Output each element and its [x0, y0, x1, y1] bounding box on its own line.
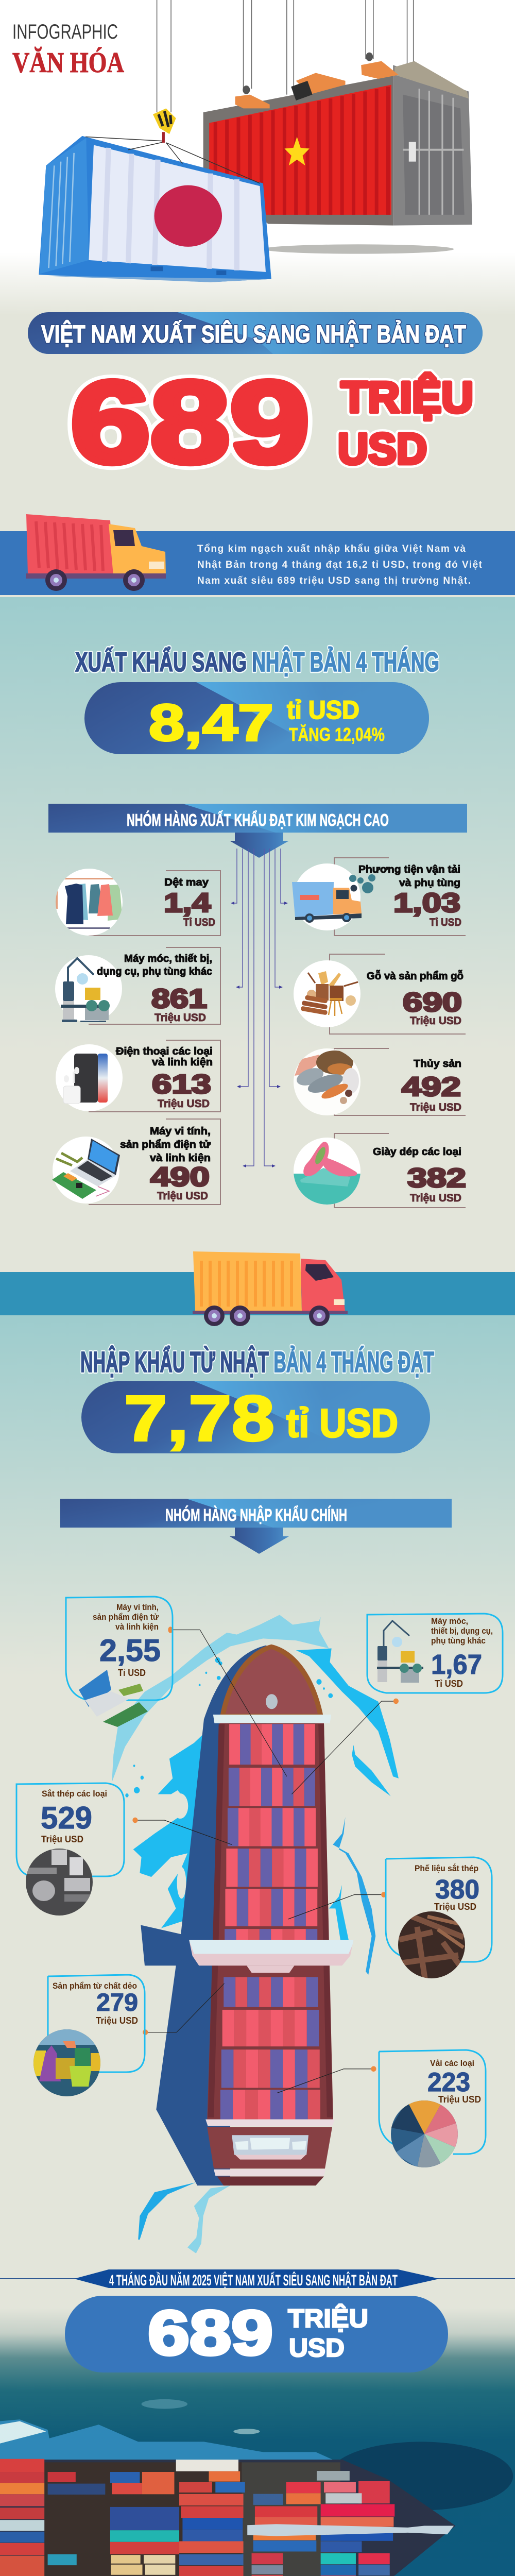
card: Máy vi tính: và linh kiện [150, 1153, 211, 1164]
photo: steel bars [26, 1849, 95, 1916]
card: Máy móc, thiết bị: Triệu USD [154, 1012, 206, 1024]
card: Điện thoại: 613 [152, 1070, 211, 1099]
container ship illustration [112, 1615, 399, 2253]
callout: Máy móc: phụ tùng khác [431, 1636, 486, 1646]
callout: Máy móc: thiết bị, dụng cụ, [431, 1626, 493, 1636]
callout: Sản phẩm từ chất dẻo [33, 1975, 145, 2096]
summary band [0, 531, 515, 595]
icon: wood logs [294, 960, 360, 1027]
callout: Phế liệu sắt thép: Phế liệu sắt thép [415, 1863, 478, 1873]
headline number: 689 triệu USD: TRIỆU [341, 373, 473, 421]
stat pill: 7,78 tỉ USD: 7,78 [124, 1383, 274, 1454]
card: Máy vi tính: sản phẩm điện tử [120, 1139, 211, 1150]
card: Máy móc, thiết bị [55, 947, 220, 1024]
icon: laptop [79, 1670, 148, 1727]
stat pill: 7,78 tỉ USD [81, 1381, 430, 1454]
card: Máy vi tính: Triệu USD [157, 1190, 208, 1202]
headline number: 689 triệu USD: TRIỆU [341, 373, 473, 421]
callout: Máy vi tính [66, 1597, 173, 1727]
summary text [197, 544, 483, 586]
logo: Infographic Văn Hóa: VĂN HÓA [12, 46, 124, 79]
icon: machine [377, 1621, 423, 1683]
stat pill: 8,47 tỉ USD [84, 682, 429, 754]
card: Máy vi tính [52, 1119, 220, 1205]
card: Gỗ và sản phẩm gỗ [294, 954, 466, 1034]
photo: plastic products [33, 2029, 101, 2096]
icon: seafood [294, 1048, 360, 1115]
stat pill: 8,47 tỉ USD: tỉ USD [287, 696, 359, 724]
container: Vietnam flag [203, 61, 472, 226]
icon: delivery truck [292, 863, 375, 930]
crane spreaders [235, 53, 399, 108]
card: Phương tiện vận tải: Phương tiện vận tải [358, 864, 460, 875]
cargo containers aft [220, 1977, 320, 2120]
callout: Sắt thép: 529 [41, 1801, 92, 1835]
logo: Infographic Văn Hóa: INFOGRAPHIC [12, 21, 118, 43]
container: Japan flag [39, 136, 271, 282]
card: Phương tiện vận tải: 1,03 [393, 888, 460, 918]
hull [207, 1645, 333, 2120]
summary text: Nam xuất siêu 689 triệu USD sang thị trường Nhật. [197, 575, 471, 586]
stern [205, 2120, 335, 2185]
card: Thủy sản: 492 [402, 1072, 461, 1102]
card: Giày dép: Triệu USD [410, 1192, 461, 1204]
ribbon: 4 tháng đầu năm 2025 [0, 2269, 515, 2289]
callout: Máy vi tính: Tỉ USD [118, 1668, 146, 1678]
callout: Sắt thép: Sắt thép các loại [42, 1789, 107, 1799]
section banner: import groups [60, 1499, 452, 1554]
icon: factory machine [55, 955, 122, 1022]
card: Thủy sản: Triệu USD [410, 1101, 461, 1113]
callout: Phế liệu sắt thép [386, 1857, 492, 1978]
card: Dệt may: 1,4 [164, 888, 211, 918]
icon: shoes [294, 1138, 360, 1210]
callout: Vải các loại: Vải các loại [430, 2058, 474, 2068]
headline number: 689 triệu USD: USD [338, 425, 427, 473]
icon: red truck [26, 514, 166, 591]
callout: Máy móc: Tỉ USD [435, 1679, 463, 1689]
callout: Máy vi tính: 2,55 [99, 1633, 161, 1668]
callout: Sắt thép: Triệu USD [41, 1834, 83, 1844]
icon: phones and earbuds [56, 1044, 123, 1111]
card: Máy móc, thiết bị: Máy móc, thiết bị, [124, 953, 212, 964]
final stat pill: 689 triệu USD: USD [289, 2333, 345, 2362]
stat pill: 8,47 tỉ USD: 8,47 [149, 694, 273, 752]
card: Dệt may: Dệt may [164, 877, 209, 888]
callout: Máy vi tính: Máy vi tính, [116, 1602, 159, 1612]
section banner: export groups [48, 804, 467, 858]
card: Thủy sản: Thủy sản [414, 1058, 461, 1070]
stat pill: 7,78 tỉ USD: tỉ USD [286, 1400, 398, 1446]
card: Máy vi tính: 490 [150, 1162, 210, 1192]
callout: Phế liệu sắt thép: 380 [435, 1875, 479, 1905]
card: Phương tiện vận tải [292, 858, 466, 936]
callout: Sản phẩm từ chất dẻo: 279 [96, 1989, 138, 2016]
icon: clothes [56, 869, 124, 936]
card: Máy vi tính: Máy vi tính, [150, 1126, 211, 1137]
water splashes [112, 1615, 399, 2253]
card: Giày dép: 382 [407, 1163, 466, 1193]
connector arrows [231, 849, 288, 1167]
title banner [28, 312, 483, 354]
card: Máy móc, thiết bị: 861 [151, 984, 207, 1014]
icon: orange truck [193, 1251, 348, 1326]
ship hull and deck [0, 2460, 455, 2576]
summary text: Nhật Bản trong 4 tháng đạt 16,2 tỉ USD, trong đó Việt [197, 560, 483, 570]
stat pill: 8,47 tỉ USD: TĂNG 12,04% [289, 724, 385, 745]
callout: Sản phẩm từ chất dẻo: Triệu USD [96, 2015, 138, 2026]
card: Phương tiện vận tải: và phụ tùng [399, 877, 460, 889]
card: Dệt may: Tỉ USD [183, 917, 215, 928]
midship bridge bar [189, 1940, 353, 1973]
card: Phương tiện vận tải: Tỉ USD [430, 917, 461, 928]
callout: Máy vi tính: sản phẩm điện tử [93, 1612, 159, 1622]
section banner: export groups: NHÓM HÀNG XUẤT KHẨU ĐẠT KIM NGẠCH CAO [127, 810, 389, 829]
teal road band [0, 1272, 515, 1315]
photo: scrap metal [398, 1911, 465, 1978]
final stat pill: 689 triệu USD: 689 [148, 2298, 273, 2368]
headline number: 689 triệu USD: 689 [71, 357, 310, 487]
card: Thủy sản [294, 1048, 466, 1115]
card: Giày dép [294, 1133, 466, 1210]
card: Gỗ và sản phẩm gỗ: Gỗ và sản phẩm gỗ [367, 970, 464, 982]
callout: Máy vi tính: và linh kiện [115, 1622, 159, 1632]
callout: Vải các loại: 223 [427, 2067, 470, 2097]
callout: Vải các loại: Triệu USD [438, 2094, 481, 2105]
ship shadow [141, 1645, 266, 2185]
crane hook [85, 108, 260, 183]
photo: fabrics [391, 2100, 458, 2167]
headline number: 689 triệu USD: 689 [71, 357, 310, 487]
callout: Máy móc [367, 1614, 503, 1693]
photo: container ship at sea [0, 2308, 515, 2576]
final stat pill: 689 triệu USD [65, 2296, 448, 2372]
callout: Sản phẩm từ chất dẻo: Sản phẩm từ chất dẻo [53, 1981, 137, 1991]
card: Điện thoại: và linh kiện [152, 1057, 213, 1068]
callout: Máy móc: 1,67 [431, 1649, 482, 1680]
headline number: 689 triệu USD: USD [338, 425, 427, 473]
card: Gỗ và sản phẩm gỗ: Triệu USD [410, 1015, 461, 1027]
hero illustration: hanging containers with Vietnam and Japan flags [39, 0, 472, 282]
summary text: Tổng kim ngạch xuất nhập khẩu giữa Việt Nam và [197, 544, 466, 554]
card: Dệt may [56, 869, 220, 936]
card: Gỗ và sản phẩm gỗ: 690 [403, 988, 462, 1018]
icon: laptop and circuit boards [52, 1137, 120, 1204]
headline number: 689 triệu USD [71, 357, 473, 487]
callout: Sắt thép [16, 1783, 124, 1916]
card: Điện thoại: Triệu USD [158, 1098, 210, 1110]
crane boom [247, 2524, 454, 2536]
callout: Vải các loại [379, 2050, 486, 2167]
card: Giày dép: Giày dép các loại [373, 1146, 461, 1158]
section banner: import groups: NHÓM HÀNG NHẬP KHẨU CHÍNH [165, 1505, 347, 1524]
logo: Infographic Văn Hóa [12, 21, 124, 79]
callout: Máy móc: Máy móc, [431, 1616, 468, 1626]
callout: Phế liệu sắt thép: Triệu USD [434, 1902, 476, 1912]
wake foam [0, 2399, 342, 2576]
card: Máy móc, thiết bị: dụng cụ, phụ tùng khác [97, 966, 212, 977]
final stat pill: 689 triệu USD: TRIỆU [288, 2304, 368, 2333]
leader lines [132, 1626, 399, 2093]
stacked containers [0, 2459, 394, 2576]
card: Điện thoại: Điện thoại các loại [116, 1046, 213, 1057]
cargo containers forward [225, 1724, 318, 1940]
card: Điện thoại [56, 1040, 220, 1112]
